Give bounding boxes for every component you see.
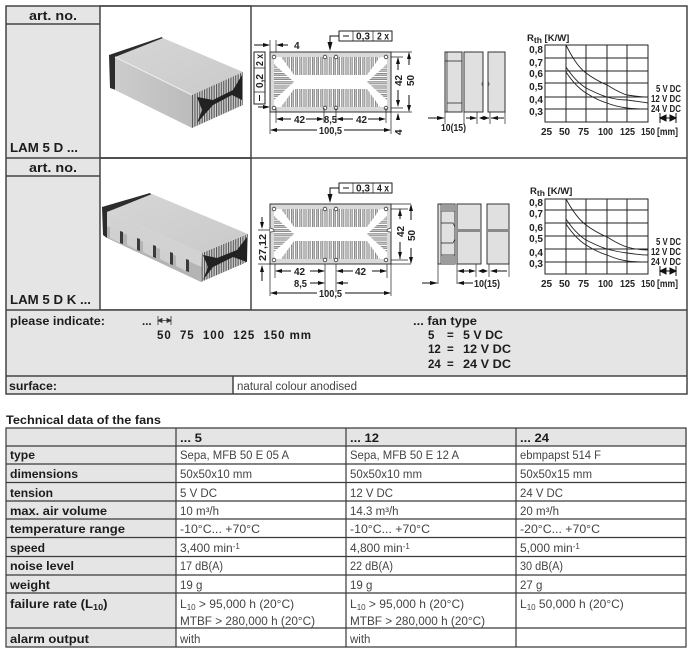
- chart x axis labels: [mm]: [657, 127, 678, 138]
- row: noise level: 22 dB(A): [350, 561, 393, 573]
- row: speed: [10, 541, 580, 555]
- row: speed: -1: [233, 542, 240, 551]
- chart series labels: [651, 84, 681, 115]
- row: failure rate: 10: [187, 603, 196, 612]
- row: temperature range: [10, 524, 600, 536]
- row: speed: speed: [10, 543, 45, 555]
- dimension label: 10(15): 10(15): [441, 123, 466, 134]
- row: weight: 19 g: [180, 580, 202, 592]
- chart axis title: th: [534, 35, 542, 45]
- chart y axis labels: 0,8: [529, 198, 543, 209]
- row: dimensions: 50x50x10 mm: [350, 469, 422, 481]
- icon: length arrow: [660, 113, 676, 123]
- row: weight: [9, 580, 542, 592]
- row: type: Sepa, MFB 50 E 12 A: [350, 450, 459, 462]
- fan type options: =: [447, 330, 454, 342]
- row: tension: 24 V DC: [520, 488, 563, 500]
- fan type options: 5: [428, 330, 435, 342]
- heat sink profile: [270, 52, 391, 112]
- row: noise level: [10, 561, 563, 573]
- chart series labels: 24 V DC: [651, 104, 681, 115]
- row: dimensions: 50x50x15 mm: [520, 469, 592, 481]
- chart y axis labels: 0,3: [529, 259, 543, 270]
- row: noise level: 30 dB(A): [520, 561, 563, 573]
- tolerance box: 0,3 2 x: 0,3: [356, 32, 370, 42]
- chart y axis labels: 0,8: [529, 45, 543, 56]
- chart axis title: th: [537, 188, 545, 198]
- row: speed: -1: [573, 542, 580, 551]
- fan type options: 24 V DC: [463, 359, 511, 371]
- chart y axis labels: 0,6: [529, 69, 543, 80]
- row: type: type: [10, 450, 35, 462]
- row: temperature range: -20°C... +70°C: [520, 524, 600, 536]
- chart: thermal resistance, LAM 5 D: [527, 33, 681, 138]
- row: tension: tension: [10, 488, 53, 500]
- outer table frame: [6, 6, 687, 394]
- panel: LAM 5 D K product row: [6, 158, 681, 310]
- row: speed: -1: [403, 542, 410, 551]
- column headers: ... 24: [520, 431, 549, 445]
- dimension drawing: profile front view: [258, 183, 418, 300]
- row: failure rate: L: [350, 597, 357, 611]
- dimension labels: 100,5: [319, 289, 342, 300]
- tolerance box: 0,3 4 x: 0,3: [356, 184, 370, 194]
- label: surface: surface:: [9, 381, 57, 393]
- dimension labels: 42, 8,5, 42, 100,5: [294, 74, 417, 137]
- row: alarm output: with: [179, 634, 200, 646]
- column headers: ... 12: [350, 431, 379, 445]
- chart y axis labels: [529, 45, 543, 118]
- article name: LAM 5 D K: LAM 5 D K ...: [10, 292, 91, 307]
- row: speed: 4,800 min: [350, 541, 403, 555]
- dimension labels: 42, 8,5, 42, 100,5: 42: [394, 74, 405, 86]
- row: max. air volume: 10 m³/h: [180, 506, 219, 518]
- fan type options: [413, 316, 511, 371]
- row: failure rate: > 95,000 h (20°C): [196, 597, 294, 611]
- row: speed: 3,400 min: [180, 541, 233, 555]
- row: max. air volume: 14.3 m³/h: [350, 506, 399, 518]
- row: dimensions: 50x50x10 mm: [180, 469, 252, 481]
- chart series labels: 24 V DC: [651, 257, 681, 268]
- column headers: [180, 431, 549, 445]
- chart x axis labels: [mm]: [657, 279, 678, 290]
- row: temperature range: -10°C... +70°C: [350, 524, 430, 536]
- value: natural colour anodised: natural colour anodised: [237, 381, 357, 393]
- chart y axis labels: 0,5: [529, 82, 543, 93]
- fan type options: 5 V DC: [463, 330, 503, 342]
- chart y axis labels: 0,5: [529, 234, 543, 245]
- row: tension: 5 V DC: [180, 488, 217, 500]
- fan type options: 12 V DC: [463, 344, 511, 356]
- tolerance box: 0,3 2 x: [328, 31, 392, 51]
- tolerance box: 0,3 4 x: [328, 183, 392, 203]
- dimension labels: 42, 8,5, 42, 100,5: 4: [394, 129, 405, 135]
- chart x axis labels: 50: [559, 279, 571, 290]
- row: dimensions: [10, 469, 592, 481]
- row: failure rate: L: [180, 597, 187, 611]
- chart curves: [566, 45, 648, 109]
- chart y axis labels: [529, 198, 543, 270]
- heading: art. no.: art. no.: [29, 8, 77, 23]
- chart x axis labels: 75: [578, 127, 590, 138]
- tolerance box: 0,3 4 x: 4 x: [377, 184, 389, 194]
- row: failure rate: 10: [357, 603, 366, 612]
- chart series labels: 12 V DC: [651, 247, 681, 258]
- chart y axis labels: 0,6: [529, 223, 543, 234]
- article number column: [6, 158, 100, 310]
- dimension drawing: side views: [422, 204, 509, 290]
- chart: thermal resistance, LAM 5 D K: [529, 186, 681, 290]
- chart y axis labels: 0,7: [529, 209, 543, 220]
- dimension label: 10(15): 10(15): [474, 279, 500, 290]
- dimension drawing: profile front view: [254, 31, 417, 137]
- dimension labels: 42, 8,5, 42, 100,5: 50: [406, 74, 417, 86]
- row: alarm output: alarm output: [10, 634, 89, 646]
- chart x axis labels: 50: [559, 127, 571, 138]
- row: type: Sepa, MFB 50 E 05 A: [180, 450, 289, 462]
- row: failure rate: 50,000 h (20°C): [536, 597, 624, 611]
- row: failure rate: failure rate (L: [10, 598, 93, 611]
- row: tension: 12 V DC: [350, 488, 393, 500]
- row: weight: 27 g: [520, 580, 542, 592]
- chart grid: [545, 45, 648, 122]
- fan type options: 12: [428, 344, 441, 356]
- tolerance box: 0,2 2 x: [254, 52, 270, 109]
- dimension drawing: side views: [428, 52, 505, 134]
- length options: 50 75 100 125 150 mm: [157, 330, 311, 342]
- photo: heat sink with side fans: [102, 193, 248, 282]
- dimension lines: widths and heights: [270, 52, 412, 134]
- row: noise level: noise level: [10, 561, 74, 573]
- heat sink profile: [270, 204, 391, 264]
- chart x axis labels: [541, 127, 678, 138]
- row: failure rate: 10: [93, 603, 103, 612]
- tolerance box: 0,2 2 x: 0,2: [255, 74, 266, 88]
- chart x axis labels: [541, 279, 678, 290]
- row: alarm output: with: [349, 634, 370, 646]
- chart x axis labels: 125: [620, 279, 635, 290]
- chart x axis labels: 125: [620, 127, 635, 138]
- article number column: [6, 6, 100, 158]
- row: failure rate: ): [103, 598, 108, 611]
- icon: length arrow: [158, 316, 171, 325]
- article name: LAM 5 D: LAM 5 D ...: [10, 140, 78, 155]
- chart x axis labels: 100: [598, 279, 613, 290]
- row: weight: weight: [9, 580, 50, 592]
- panel: LAM 5 D product row: [6, 6, 687, 158]
- photo: heat sink with fans: [109, 37, 243, 128]
- chart y axis labels: 0,4: [529, 248, 543, 259]
- row: noise level: 17 dB(A): [180, 561, 223, 573]
- chart axis title: R: [530, 186, 537, 197]
- chart y axis labels: 0,4: [529, 95, 543, 106]
- chart x axis labels: 150: [641, 279, 655, 290]
- row: max. air volume: 20 m³/h: [520, 506, 559, 518]
- chart y axis labels: 0,3: [529, 107, 543, 118]
- icon: length arrow: [660, 266, 676, 276]
- fan type options: ... fan type: [413, 316, 477, 328]
- chart x axis labels: 25: [541, 127, 553, 138]
- row: failure rate: MTBF > 280,000 h (20°C): [350, 616, 485, 628]
- row: type: [10, 450, 601, 462]
- row: max. air volume: [10, 506, 559, 518]
- row: weight: 19 g: [350, 580, 372, 592]
- chart axis title: [K/W]: [542, 33, 569, 44]
- dimension labels: 42: [355, 267, 367, 278]
- chart x axis labels: 150: [641, 127, 655, 138]
- chart y axis labels: 0,7: [529, 58, 543, 69]
- chart series labels: 5 V DC: [656, 84, 681, 95]
- dimension labels: [258, 225, 418, 300]
- chart series labels: 5 V DC: [656, 237, 681, 248]
- chart curves: [566, 199, 648, 262]
- row: failure rate: 10: [527, 603, 536, 612]
- chart grid: [545, 199, 648, 274]
- fan type options: 24: [428, 359, 441, 371]
- dimension labels: 42: [294, 267, 306, 278]
- dimension labels: 42, 8,5, 42, 100,5: 42: [356, 115, 368, 126]
- heading: art. no.: art. no.: [29, 160, 77, 175]
- heading: technical data of the fans: Technical data of the fans: [6, 415, 161, 427]
- row: temperature range: -10°C... +70°C: [180, 524, 260, 536]
- dimension label: 4: 4: [294, 41, 300, 52]
- column headers: ... 5: [180, 431, 202, 445]
- dimension labels: 50: [407, 229, 418, 241]
- length options: ...: [142, 316, 152, 328]
- dimension labels: 42, 8,5, 42, 100,5: 42: [294, 115, 306, 126]
- chart series labels: [651, 237, 681, 268]
- panel: surface: [6, 376, 357, 394]
- chart x axis labels: 100: [598, 127, 613, 138]
- chart axis title: [K/W]: [545, 186, 572, 197]
- dimension labels: 42, 8,5, 42, 100,5: 8,5: [324, 115, 337, 126]
- row: failure rate: [10, 597, 624, 628]
- chart series labels: 12 V DC: [651, 94, 681, 105]
- row: max. air volume: max. air volume: [10, 506, 107, 518]
- table: fan technical data: [6, 428, 687, 647]
- dimension labels: 8,5: [294, 279, 307, 290]
- tolerance box: 0,3 2 x: 2 x: [377, 32, 389, 42]
- label: please indicate: please indicate:: [10, 316, 105, 328]
- chart axis title: R: [527, 33, 534, 44]
- dimension labels: 42, 8,5, 42, 100,5: 100,5: [319, 126, 342, 137]
- panel: please indicate: [6, 310, 687, 376]
- row: alarm output: [10, 634, 370, 646]
- row: type: ebmpapst 514 F: [520, 450, 601, 462]
- fan type options: =: [447, 344, 454, 356]
- row: failure rate: > 95,000 h (20°C): [366, 597, 464, 611]
- row: temperature range: temperature range: [10, 524, 125, 536]
- row: dimensions: dimensions: [10, 469, 78, 481]
- chart x axis labels: 75: [578, 279, 590, 290]
- dimension labels: 27,12: [258, 234, 269, 261]
- length options: [142, 316, 311, 342]
- row: failure rate: MTBF > 280,000 h (20°C): [180, 616, 315, 628]
- fan type options: =: [447, 359, 454, 371]
- chart x axis labels: 25: [541, 279, 553, 290]
- row: tension: [10, 488, 563, 500]
- row: speed: 5,000 min: [520, 541, 573, 555]
- tolerance box: 0,2 2 x: 2 x: [255, 54, 266, 66]
- dimension lines: widths and heights: [258, 204, 413, 296]
- dimension labels: 42: [396, 225, 407, 237]
- row: failure rate: L: [520, 597, 527, 611]
